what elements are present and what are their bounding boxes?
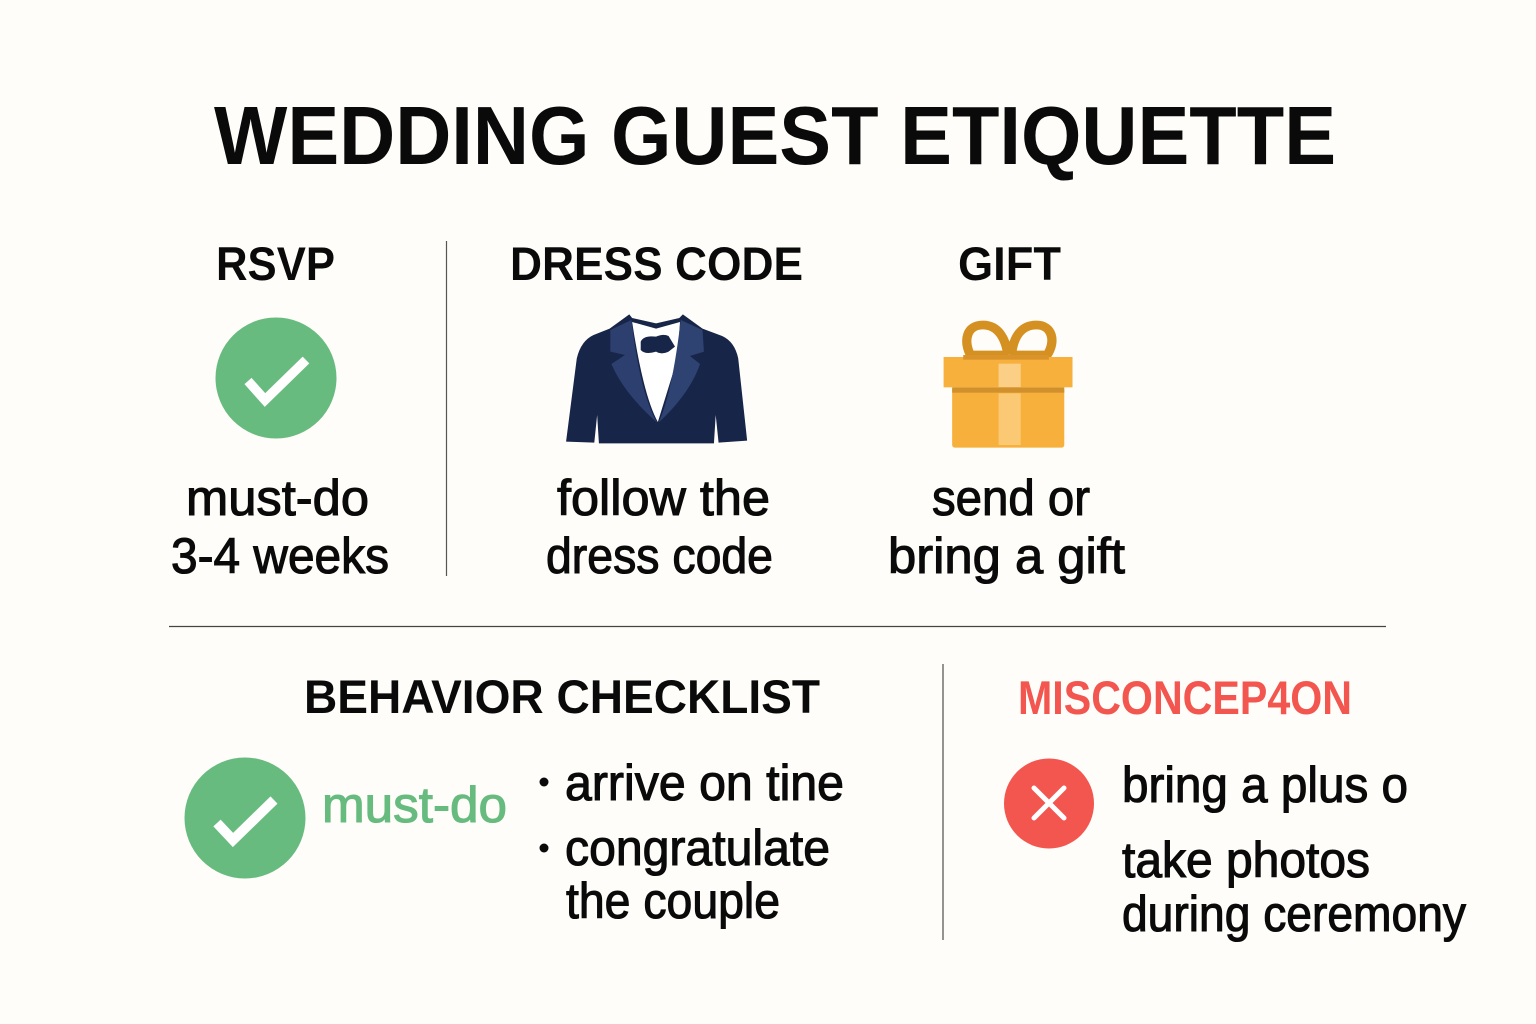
icon: red cross bbox=[1004, 758, 1094, 848]
misconception items: take photos bbox=[1122, 832, 1370, 888]
panel: dress code bbox=[510, 237, 803, 584]
checklist items: arrive on tine bbox=[565, 755, 844, 811]
RSVP heading: RSVP bbox=[216, 237, 335, 290]
RSVP text bbox=[171, 470, 389, 584]
gift heading: GIFT bbox=[958, 237, 1061, 290]
dress code text: dress code bbox=[546, 528, 773, 584]
panel: misconception bbox=[1004, 671, 1466, 942]
dress code text: follow the bbox=[557, 470, 770, 526]
icon: green check large bbox=[184, 758, 306, 878]
panel: behavior checklist bbox=[184, 670, 844, 929]
panel: RSVP bbox=[171, 237, 389, 584]
must-do label: must-do bbox=[322, 777, 507, 833]
gift text: bring a gift bbox=[888, 528, 1125, 584]
panel: gift bbox=[888, 237, 1125, 584]
misconception items bbox=[1122, 757, 1466, 942]
dress code text bbox=[546, 470, 773, 584]
RSVP text: 3-4 weeks bbox=[171, 528, 389, 584]
gift text: send or bbox=[932, 470, 1090, 526]
checklist items: the couple bbox=[566, 873, 780, 929]
misconception items: during ceremony bbox=[1122, 886, 1466, 942]
checklist items: congratulate bbox=[565, 820, 830, 876]
icon: tuxedo jacket bbox=[566, 314, 747, 443]
misconception items: bring a plus o bbox=[1122, 757, 1408, 813]
title: WEDDING GUEST ETIQUETTE bbox=[214, 89, 1336, 182]
dress code heading: DRESS CODE bbox=[510, 237, 803, 290]
checklist items bbox=[540, 755, 844, 929]
misconception heading: MISCONCEP4ON bbox=[1018, 671, 1352, 724]
RSVP text: must-do bbox=[186, 470, 369, 526]
behavior checklist heading: BEHAVIOR CHECKLIST bbox=[304, 670, 820, 723]
icon: gift box bbox=[944, 325, 1072, 448]
gift text bbox=[888, 470, 1125, 584]
icon: green check bbox=[216, 318, 336, 438]
